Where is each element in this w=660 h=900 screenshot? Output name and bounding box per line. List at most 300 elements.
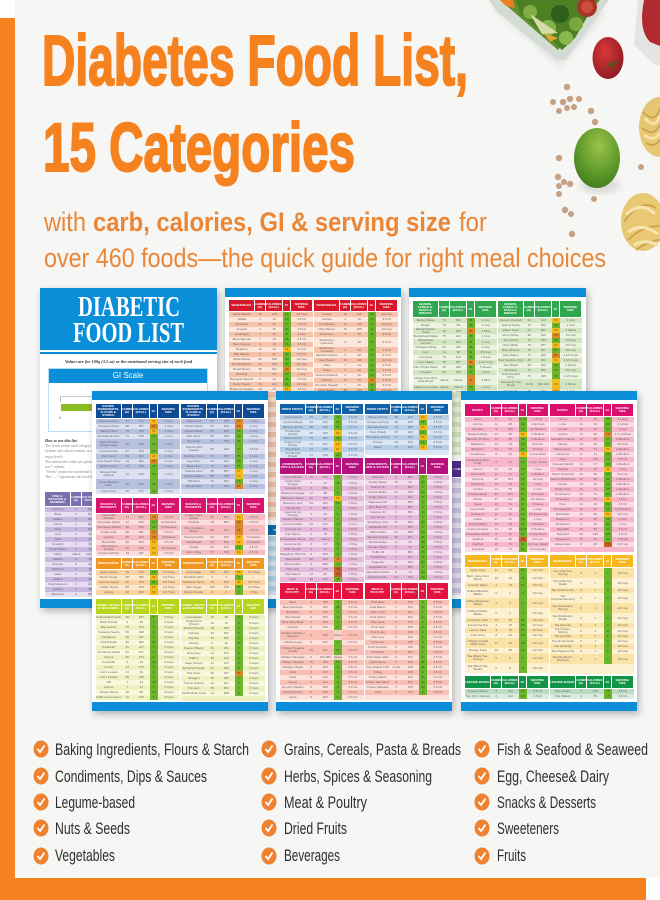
table: meat left: 0 bbox=[310, 695, 312, 699]
table: fruits right: Lychee bbox=[558, 432, 568, 436]
table: fruits left: Blueberry bbox=[471, 447, 484, 451]
table: fruits left: 1 Cup, Sliced bbox=[529, 460, 547, 464]
table: herbs left: Chili Powder bbox=[100, 640, 117, 644]
table: meat left: 3.5 Oz bbox=[348, 670, 357, 674]
table: condiments right: 1 Tbsp bbox=[433, 520, 442, 524]
table: beverages left: Tea (Black Tea, Weak) bbox=[468, 664, 488, 671]
table: snacks right: 237 bbox=[224, 545, 229, 549]
table: beverages left: 46 bbox=[509, 568, 512, 572]
table: sweeteners left: 380 bbox=[139, 575, 144, 579]
food photo decoration bbox=[489, 0, 660, 251]
table: condiments left: Varies bbox=[321, 537, 329, 541]
table: baking left: 81 bbox=[126, 454, 129, 458]
table: herbs left: 18 bbox=[126, 690, 129, 694]
table: beverages right: 0 bbox=[580, 634, 582, 638]
table: fruits left: 1 Medium bbox=[531, 432, 544, 436]
table: meat left: 16 bbox=[310, 648, 313, 652]
table: beverages left: 1/2 Cup bbox=[532, 576, 543, 580]
table: dried fruits right: 3.5 Oz bbox=[433, 425, 442, 429]
table: vegetables right: Lentils bbox=[322, 312, 331, 316]
table: baking left: 45 bbox=[152, 449, 155, 453]
table: snacks right: 62 bbox=[237, 514, 240, 518]
table: grains left: 72 bbox=[443, 340, 446, 344]
table: meat right: 219 bbox=[408, 630, 413, 634]
table: beverages left: 4 bbox=[495, 583, 497, 587]
vegetable rows continued bbox=[229, 392, 397, 520]
table: baking left: 1 Cup bbox=[165, 464, 173, 468]
table: dried fruits right: 69 bbox=[395, 420, 398, 424]
table: fish and seafood: 131 bbox=[88, 507, 93, 511]
GI scale heading: GI Scale bbox=[113, 371, 143, 380]
table: vegetables left: VEGETABLES bbox=[231, 303, 251, 307]
table: snacks right: 50 bbox=[211, 514, 214, 518]
table: fish and seafood: 0 bbox=[75, 592, 77, 596]
table: meat right: 245 bbox=[408, 635, 413, 639]
table: vegetables left: 43 bbox=[273, 377, 276, 381]
table: herbs right: SERVING SIZE bbox=[247, 602, 260, 610]
table: condiments right: 6 bbox=[395, 570, 397, 574]
table: grains left: 75 bbox=[443, 334, 446, 338]
table: beverages left: Tea (Black Tea, Strong) bbox=[468, 654, 488, 661]
table: vegetables right: Lettuce bbox=[322, 317, 332, 321]
table: dried fruits right: 296 bbox=[408, 425, 413, 429]
table: meat right: 30 bbox=[421, 675, 424, 679]
table: fruits right: 73 bbox=[594, 447, 597, 451]
table: herbs right: 3 Cups bbox=[249, 661, 258, 665]
table: baking left: Coconut Flour bbox=[99, 449, 118, 453]
table: fruits left: 10 bbox=[495, 442, 498, 446]
table: meat left: 0 bbox=[337, 685, 339, 689]
table: snacks left: 88 bbox=[126, 530, 129, 534]
table: herbs left: HERBS, SPICES & SEASONING bbox=[97, 602, 120, 610]
table: vegetables left: 3.5 Oz bbox=[297, 317, 306, 321]
table: beverages right: 0 bbox=[580, 596, 582, 600]
table: dried fruits left: GI bbox=[336, 406, 339, 410]
table: fruits left: 2/3 Cup bbox=[532, 442, 543, 446]
table: sweeteners left: 1/2 Tbsp bbox=[163, 575, 175, 579]
table: grains left: Varies bbox=[454, 378, 462, 382]
GI green bar bbox=[61, 404, 121, 411]
table: dried fruits right: 69 bbox=[395, 430, 398, 434]
table: condiments right: 1 Tbsp bbox=[433, 550, 442, 554]
table: meat right: 3.5 Oz bbox=[433, 670, 442, 674]
table: fruits right: 1 Cup bbox=[619, 522, 627, 526]
table: beverages left: Coffee (Espresso, Black) bbox=[466, 599, 490, 606]
table: fish and seafood: 91 bbox=[89, 557, 92, 561]
table: grains left: Cornmeal bbox=[419, 355, 432, 359]
table: dried fruits left: 3.5 Oz bbox=[348, 425, 357, 429]
table: fish and seafood: 0 bbox=[75, 587, 77, 591]
table: grains right: Rye Bread bbox=[504, 363, 518, 367]
table: baking left: Caster Powder (Sugar Free) bbox=[99, 440, 119, 447]
table: condiments right: 322 bbox=[408, 495, 413, 499]
table: meat left: 0 bbox=[337, 680, 339, 684]
table: herbs right: Star Anise bbox=[187, 671, 201, 675]
table: herbs left: 333 bbox=[139, 630, 144, 634]
table: fruits left: 14 bbox=[495, 487, 498, 491]
table: baking right: 1 Cup bbox=[250, 434, 258, 438]
table: beverages right: 1/2 Cup bbox=[617, 639, 628, 643]
table: meat right: 3.5 Oz bbox=[433, 675, 442, 679]
table: fish and seafood: GI bbox=[101, 496, 104, 500]
table: sweeteners right bbox=[181, 558, 265, 595]
table: vegetables right: 21 bbox=[344, 322, 347, 326]
table: fruits right: 42 bbox=[606, 477, 609, 481]
table: fruits right: 50 bbox=[606, 492, 609, 496]
table: herbs left: 50 bbox=[126, 640, 129, 644]
table: grains left: 343 bbox=[456, 334, 461, 338]
table: fruits right: 3.5 Oz bbox=[618, 532, 627, 536]
heading line 2: 15 Categories bbox=[43, 109, 355, 186]
table: herbs left: Cardamom bbox=[101, 635, 116, 639]
how to use text bbox=[45, 438, 110, 479]
table: dried fruits left: 66 bbox=[310, 415, 313, 419]
table: vegetables left: Adzuki Beans bbox=[233, 312, 251, 316]
table: condiments right: 287 bbox=[408, 535, 413, 539]
table: herbs left: 5 bbox=[153, 635, 155, 639]
table: condiments left: 4 bbox=[310, 532, 312, 536]
table: dried fruits left: SERVING SIZE bbox=[346, 405, 359, 412]
table: meat right: 3.5 Oz bbox=[433, 605, 442, 609]
table: herbs left: 5 bbox=[153, 655, 155, 659]
table: snacks left: 381 bbox=[139, 530, 144, 534]
table: beverages left: Coconut Water bbox=[468, 583, 488, 587]
table: sweeteners left: Coconut Sugar bbox=[99, 580, 119, 584]
table: snacks right: 403 bbox=[224, 528, 229, 532]
table: sweeteners right: 400 bbox=[224, 570, 229, 574]
table: dried fruits left: 325 bbox=[323, 430, 328, 434]
table: vegetables right: 3.5 Oz bbox=[382, 340, 391, 344]
table: snacks left: 450 bbox=[139, 540, 144, 544]
table: beverages right: 0 bbox=[607, 644, 609, 648]
icon: tomato bbox=[592, 37, 624, 79]
table: legumes right bbox=[550, 676, 634, 699]
table: condiments right: 539 bbox=[408, 490, 413, 494]
table: dried fruits left: 77 bbox=[310, 452, 313, 456]
table: sweeteners right: 75 bbox=[211, 580, 214, 584]
table: dried fruits left: 77 bbox=[310, 442, 313, 446]
table: herbs left: 325 bbox=[139, 675, 144, 679]
table: condiments right: 15 bbox=[421, 530, 424, 534]
table: fruits right: 8 bbox=[580, 522, 582, 526]
table: fruits right: 42 bbox=[606, 482, 609, 486]
table: grains right: 63 bbox=[554, 328, 557, 332]
table: meat right: Quick Mince bbox=[369, 660, 386, 664]
table: vegetables left: 43 bbox=[273, 347, 276, 351]
table: vegetables left: Arugula bbox=[237, 327, 247, 331]
table: meat left: 3.5 Oz bbox=[348, 690, 357, 694]
table: fruits left: 57 bbox=[509, 447, 512, 451]
table: herbs left: 66 bbox=[126, 655, 129, 659]
table: baking right: 358 bbox=[224, 474, 229, 478]
table: vegetables right: 15 bbox=[370, 340, 373, 344]
table: condiments right: 17 bbox=[395, 540, 398, 544]
table: beverages right: 0 bbox=[580, 649, 582, 653]
table: fruits left: 12-24 bbox=[519, 527, 527, 531]
table: meat left: 220-280 bbox=[320, 655, 331, 659]
table: condiments left: 3 bbox=[310, 512, 312, 516]
table: fruits right: 83 bbox=[594, 507, 597, 511]
table: fish and seafood: 89 bbox=[89, 587, 92, 591]
table: herbs right: 251 bbox=[224, 646, 229, 650]
table: vegetables left: 25 bbox=[259, 312, 262, 316]
table: meat right: 3.5 Oz bbox=[433, 655, 442, 659]
table: fruits right: 50 bbox=[606, 427, 609, 431]
table: fruits right: Strawberry bbox=[555, 522, 570, 526]
table: vegetables left: Asparagus bbox=[235, 332, 249, 336]
table: herbs right: 354 bbox=[224, 686, 229, 690]
table: baking right: 441 bbox=[224, 459, 229, 463]
table: vegetables left: Bean Sprouts bbox=[233, 337, 251, 341]
table: grains left: 80 bbox=[469, 328, 472, 332]
table: beverages left: 10 bbox=[495, 648, 498, 652]
table: baking right: 45 bbox=[237, 439, 240, 443]
table: snacks left: 546 bbox=[139, 520, 144, 524]
table: meat left: 160 bbox=[323, 632, 328, 636]
table: fruits left: 15 bbox=[495, 542, 498, 546]
table: legumes left: SERVING SIZE bbox=[531, 678, 544, 685]
table: baking right: 3.5 Oz bbox=[249, 446, 258, 450]
table: dried fruits left: 82 bbox=[310, 430, 313, 434]
table: fruits right: 32 bbox=[594, 522, 597, 526]
table: fish and seafood: Cod bbox=[55, 532, 60, 536]
table: sweeteners right: SERVING SIZE bbox=[247, 560, 260, 566]
table: condiments right: 0 bbox=[422, 550, 424, 554]
table: fruits left: Guava (Unripe) bbox=[467, 527, 488, 531]
icon: second container with red pepper bbox=[634, 0, 660, 65]
table: beverages right: 1/2 Cup bbox=[617, 649, 628, 653]
table: beverages left: 46 bbox=[521, 648, 524, 652]
table: fruits left: 61 bbox=[509, 542, 512, 546]
table: beverages right: Tea (Dandelion, Strong) bbox=[552, 604, 573, 611]
table: fruits left: 67 bbox=[509, 517, 512, 521]
table: snacks right: CALORIES (KCAL) bbox=[218, 502, 234, 508]
table: meat left: 3.5 Oz bbox=[348, 600, 357, 604]
table: baking left: 1 Cup bbox=[165, 442, 173, 446]
table: dried fruits left: 88 bbox=[310, 425, 313, 429]
table: baking left: 1 Cup bbox=[165, 472, 173, 476]
how to use text: size" column. bbox=[45, 465, 65, 469]
table: dried fruits left: 307 bbox=[323, 442, 328, 446]
table: fish and seafood: 3.5 Oz bbox=[113, 562, 122, 566]
table: herbs left: 80 bbox=[140, 690, 143, 694]
table: fish and seafood: 0 bbox=[75, 517, 77, 521]
table: grains right: 2 Slices bbox=[565, 382, 576, 386]
table: baking right: 76 bbox=[211, 419, 214, 423]
table: meat left: 0 bbox=[337, 665, 339, 669]
table: baking right: 64 bbox=[211, 429, 214, 433]
table: herbs left: 3 Cups bbox=[164, 630, 174, 634]
table: vegetables left: 3.5 Oz bbox=[297, 352, 306, 356]
table: vegetables left: 1/2 Cup bbox=[296, 362, 307, 366]
table: beverages right: 1 bbox=[594, 606, 596, 610]
table: condiments left: 17 bbox=[310, 491, 313, 495]
table: meat left: 0 bbox=[337, 600, 339, 604]
table: fish and seafood: Grouper bbox=[52, 562, 63, 566]
table: fruits left: 47 bbox=[521, 472, 524, 476]
table: condiments left: 5 bbox=[337, 537, 339, 541]
table: baking left: Buckwheat Flour bbox=[98, 434, 120, 438]
table: meat left: 294 bbox=[323, 695, 328, 699]
table: beverages right: 0 bbox=[607, 656, 609, 660]
table: meat left: 3.5 Oz bbox=[348, 605, 357, 609]
table: condiments right: 15 bbox=[421, 480, 424, 484]
table: condiments right: 884 bbox=[408, 475, 413, 479]
table: condiments left: 1 Tbsp bbox=[348, 557, 357, 561]
table: fruits right: Lemon bbox=[558, 417, 567, 421]
table: herbs left: Dill bbox=[107, 680, 111, 684]
table: herbs right: 3 Cups bbox=[249, 686, 258, 690]
table: vegetables left: Borlotti Beans bbox=[232, 362, 251, 366]
table: fruits left: 3 Fejoas bbox=[532, 502, 544, 506]
table: fruits left: 15 bbox=[495, 477, 498, 481]
table: fruits left: 34 bbox=[521, 422, 524, 426]
table: legumes left: 4 bbox=[495, 689, 497, 693]
item: fruits bbox=[474, 847, 526, 865]
table: herbs right: Turmeric bbox=[188, 686, 200, 690]
table: fish and seafood: Flatfish bbox=[53, 557, 63, 561]
table: herbs left: 30 bbox=[152, 660, 155, 664]
table: meat right: Soy Protein TVP bbox=[367, 665, 389, 669]
table: dried fruits left: 349 bbox=[323, 452, 328, 456]
table: fruits right: 70 bbox=[594, 492, 597, 496]
table: meat right: Pork (Ham) bbox=[370, 615, 385, 619]
table: baking right: 361 bbox=[224, 464, 229, 468]
table: meat right: 3 bbox=[395, 685, 397, 689]
table: grains right: 1 1/2 Cups bbox=[563, 353, 578, 357]
table: condiments left: 6 bbox=[337, 542, 339, 546]
table: beverages right: 0 bbox=[607, 616, 609, 620]
table: vegetables right: 15 bbox=[370, 353, 373, 357]
table: meat right: Veal bbox=[375, 690, 381, 694]
table: vegetables right: 7 bbox=[344, 383, 346, 387]
table: fruits left: 4 Apricots bbox=[531, 422, 544, 426]
table: vegetables right: 9 bbox=[344, 368, 346, 372]
table: beverages right: 0 bbox=[580, 628, 582, 632]
table: fruits left: Honeydew Melon bbox=[466, 532, 489, 536]
table: fish and seafood: 3.5 Oz bbox=[113, 532, 122, 536]
table: fruits left: 22 bbox=[521, 467, 524, 471]
table: dried fruits right: Pineapple (Dried) bbox=[366, 435, 389, 439]
table: legumes right: 55 bbox=[594, 694, 597, 698]
table: herbs right: Paprika bbox=[189, 636, 199, 640]
table: vegetables left: 10 bbox=[259, 347, 262, 351]
table: meat left: 270 bbox=[323, 610, 328, 614]
table: baking right: 1 Cup bbox=[250, 429, 258, 433]
item: snacks: Snacks & Desserts bbox=[497, 794, 596, 812]
table: snacks left: Popcorn (Plain) bbox=[98, 551, 119, 555]
table: beverages right: 0 bbox=[580, 656, 582, 660]
table: meat left: 3.5 Oz bbox=[348, 625, 357, 629]
table: fruits right: 44 bbox=[594, 452, 597, 456]
table: fruits right: 115 bbox=[593, 457, 598, 461]
orange bottom bar bbox=[0, 878, 646, 900]
table: beverages left: 45 bbox=[509, 648, 512, 652]
table: vegetables left: 51 bbox=[285, 387, 288, 391]
table: snacks left: 459 bbox=[139, 546, 144, 550]
table: dried fruits left: 29 bbox=[336, 415, 339, 419]
table: herbs right: 24 bbox=[211, 681, 214, 685]
table: dried fruits right: DRIED FRUITS bbox=[367, 406, 388, 410]
table: condiments left: 1 Tbsp bbox=[348, 486, 357, 490]
table: grains right: 352 bbox=[541, 338, 546, 342]
table: fruits right bbox=[550, 404, 634, 552]
table: fruits left: CARBS (G) bbox=[490, 406, 501, 413]
table: sweeteners left: CARBS (G) bbox=[122, 560, 132, 566]
table: baking left: Einkorn Flour bbox=[100, 464, 118, 468]
table: snacks right: 3.5 Oz bbox=[249, 550, 258, 554]
table: fish and seafood: King Mackerel bbox=[48, 582, 67, 586]
table: grains left: 1 3/4 Cups bbox=[478, 360, 493, 364]
table: fish and seafood: 0 bbox=[75, 532, 77, 536]
table: baking right: 76 bbox=[211, 439, 214, 443]
table: dried fruits right: 29 bbox=[421, 440, 424, 444]
table: snacks left: 80 bbox=[126, 535, 129, 539]
table: grains right: Quinoa (Cooked) bbox=[499, 318, 522, 322]
table: meat left: Beef bbox=[290, 600, 296, 604]
table: snacks left: Instant Jelly bbox=[101, 530, 117, 534]
table: condiments left: 177 bbox=[323, 542, 328, 546]
table: condiments right: Olive Oil bbox=[372, 475, 383, 479]
table: vegetables right: Onion bbox=[323, 368, 331, 372]
table: condiments right: CONDIMENTS, DIPS & SAUCES bbox=[366, 462, 389, 469]
how to use text: The mentioned values are given per 100g bbox=[45, 460, 106, 464]
table: baking right: CALORIES (KCAL) bbox=[218, 407, 234, 414]
table: meat right: 0 bbox=[395, 610, 397, 614]
table: fruits right: 13 bbox=[580, 437, 583, 441]
table: fruits left: 52 bbox=[509, 417, 512, 421]
table: snacks right: 3.5 Oz bbox=[249, 545, 258, 549]
table: meat right: 3.5 Oz bbox=[433, 625, 442, 629]
table: meat right: 540 bbox=[408, 605, 413, 609]
how to use text: "Varies" means the nutritional values may bbox=[45, 470, 107, 474]
table: vegetables right: 31 bbox=[370, 322, 373, 326]
table: grains left: 45 bbox=[469, 334, 472, 338]
item: condiments: Condiments, Dips & Sauces bbox=[55, 768, 207, 786]
table: baking left: 333 bbox=[139, 464, 144, 468]
table: legumes right: 144 bbox=[593, 689, 598, 693]
table: beverages left: 1/2 Cup bbox=[532, 600, 543, 604]
table: herbs right: 64 bbox=[211, 646, 214, 650]
table: vegetables left: 2 bbox=[259, 317, 261, 321]
table: herbs right: 5 bbox=[238, 676, 240, 680]
table: condiments right: Rapeseed Oil bbox=[369, 500, 387, 504]
table: snacks left: 47 bbox=[126, 520, 129, 524]
table: baking right: 1 Cup bbox=[250, 439, 258, 443]
table: condiments right: Strawberry Jam bbox=[367, 520, 388, 524]
table: condiments right: Soy Sauce bbox=[370, 515, 385, 519]
table: meat right: 0 bbox=[422, 650, 424, 654]
table: vegetables left: Artichoke bbox=[235, 322, 248, 326]
table: snacks left: 78 bbox=[126, 551, 129, 555]
table: fruits left: 45 bbox=[521, 477, 524, 481]
table: grains right: 57 bbox=[554, 343, 557, 347]
table: condiments left: 56 bbox=[336, 496, 339, 500]
table: meat right: 3.5 Oz bbox=[433, 660, 442, 664]
table: grains right: 75 bbox=[528, 389, 531, 393]
table: dried fruits left: 3.5 Oz bbox=[348, 447, 357, 451]
table: meat left: 3.5 Oz bbox=[348, 655, 357, 659]
table: beverages left: 1/2 Cup bbox=[532, 640, 543, 644]
table: fruits left: Banana (Unripe) bbox=[467, 437, 489, 441]
table: fish and seafood: 3.5 Oz bbox=[113, 527, 122, 531]
item: meat bbox=[262, 794, 368, 812]
table: grains left bbox=[413, 301, 497, 394]
how to use text: The foods within each category are listed in bbox=[45, 444, 110, 448]
table: snacks right: Pretzels bbox=[188, 520, 199, 524]
table: meat right: 198 bbox=[408, 640, 413, 644]
table: fruits left: 54 bbox=[521, 492, 524, 496]
